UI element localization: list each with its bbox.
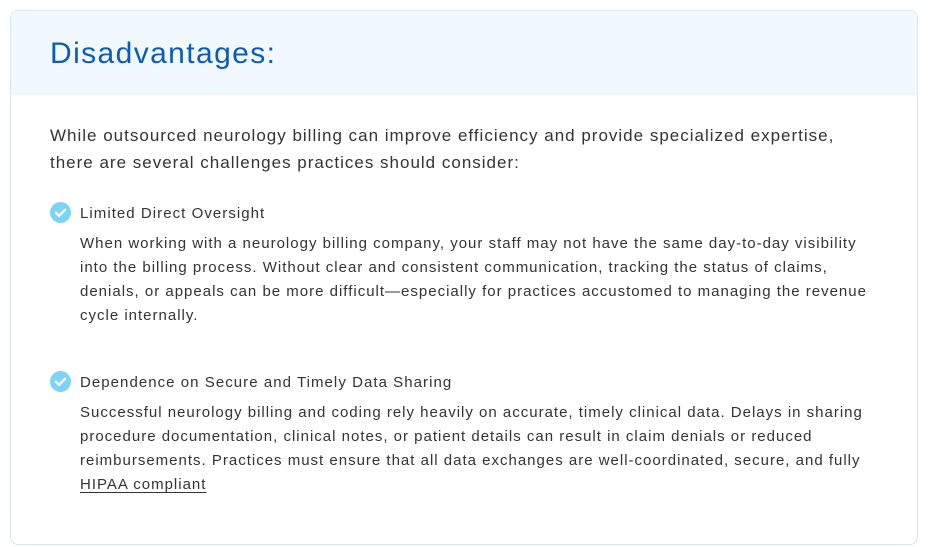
intro text (50, 126, 834, 172)
icon: check (50, 371, 71, 392)
item body: denials, or appeals can be more difficult—especially for practices accustomed to managing the revenue (80, 283, 867, 300)
item heading: Limited Direct Oversight (80, 205, 265, 222)
item: limited direct oversight (50, 202, 867, 324)
item body: reimbursements. Practices must ensure that all data exchanges are well-coordinated, secure, and fully (80, 452, 861, 469)
item body: into the billing process. Without clear and consistent communication, tracking the status of claims, (80, 259, 828, 276)
item: data sharing (50, 371, 863, 493)
title: Disadvantages: (50, 37, 276, 70)
item body: HIPAA compliant (80, 476, 206, 493)
intro text: there are several challenges practices should consider: (50, 153, 520, 172)
item body: When working with a neurology billing company, your staff may not have the same day-to-day visibility (80, 235, 857, 252)
header band (11, 11, 917, 93)
item body: procedure documentation, clinical notes, or patient details can result in claim denials or reduced (80, 428, 813, 445)
item body (80, 404, 863, 493)
item heading: Dependence on Secure and Timely Data Sharing (80, 374, 452, 391)
item body (80, 235, 867, 324)
item body: Successful neurology billing and coding rely heavily on accurate, timely clinical data. Delays in sharing (80, 404, 863, 421)
intro text: While outsourced neurology billing can improve efficiency and provide specialized expertise, (50, 126, 834, 145)
icon: check (50, 202, 71, 223)
item body: cycle internally. (80, 307, 198, 324)
